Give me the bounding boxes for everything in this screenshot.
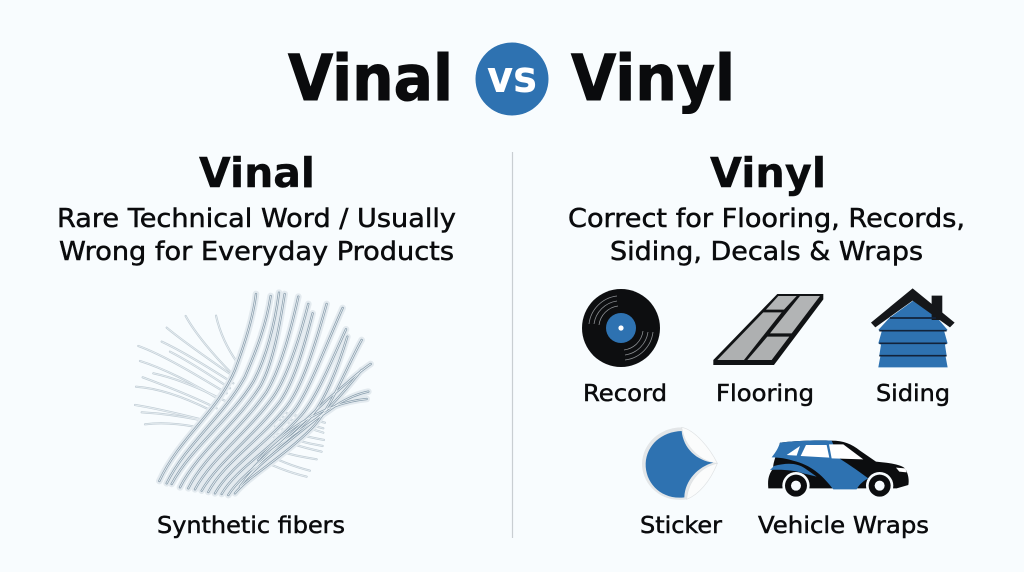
heading: vinyl: Vinyl xyxy=(710,149,826,197)
icon: vehicle wrap car xyxy=(768,440,909,499)
label: siding: Siding xyxy=(876,381,950,407)
icon: record xyxy=(582,289,660,367)
label: record: Record xyxy=(583,381,667,407)
vinyl description xyxy=(568,204,965,267)
vinal description: Wrong for Everyday Products xyxy=(59,237,454,267)
title word: Vinyl: Vinyl xyxy=(571,42,735,115)
title word: Vinal: Vinal xyxy=(288,42,453,115)
icon: flooring xyxy=(713,294,823,365)
vs badge: vs xyxy=(487,52,537,103)
label: sticker: Sticker xyxy=(640,513,723,539)
icon: synthetic fibers xyxy=(135,293,371,495)
vinal description: Rare Technical Word / Usually xyxy=(57,204,456,234)
label: synthetic fibers: Synthetic fibers xyxy=(157,513,345,539)
title xyxy=(288,42,735,116)
heading: vinal: Vinal xyxy=(199,149,315,197)
label: vehicle wraps: Vehicle Wraps xyxy=(758,513,929,539)
vs badge xyxy=(476,42,548,116)
vinal description xyxy=(57,204,456,267)
panel: vinyl xyxy=(568,149,965,539)
icon: sticker xyxy=(642,427,717,500)
vinyl description: Correct for Flooring, Records, xyxy=(568,204,965,234)
label: flooring: Flooring xyxy=(716,381,814,407)
vinyl description: Siding, Decals & Wraps xyxy=(610,237,923,267)
panel: vinal xyxy=(57,149,456,539)
icon: siding xyxy=(871,288,955,367)
